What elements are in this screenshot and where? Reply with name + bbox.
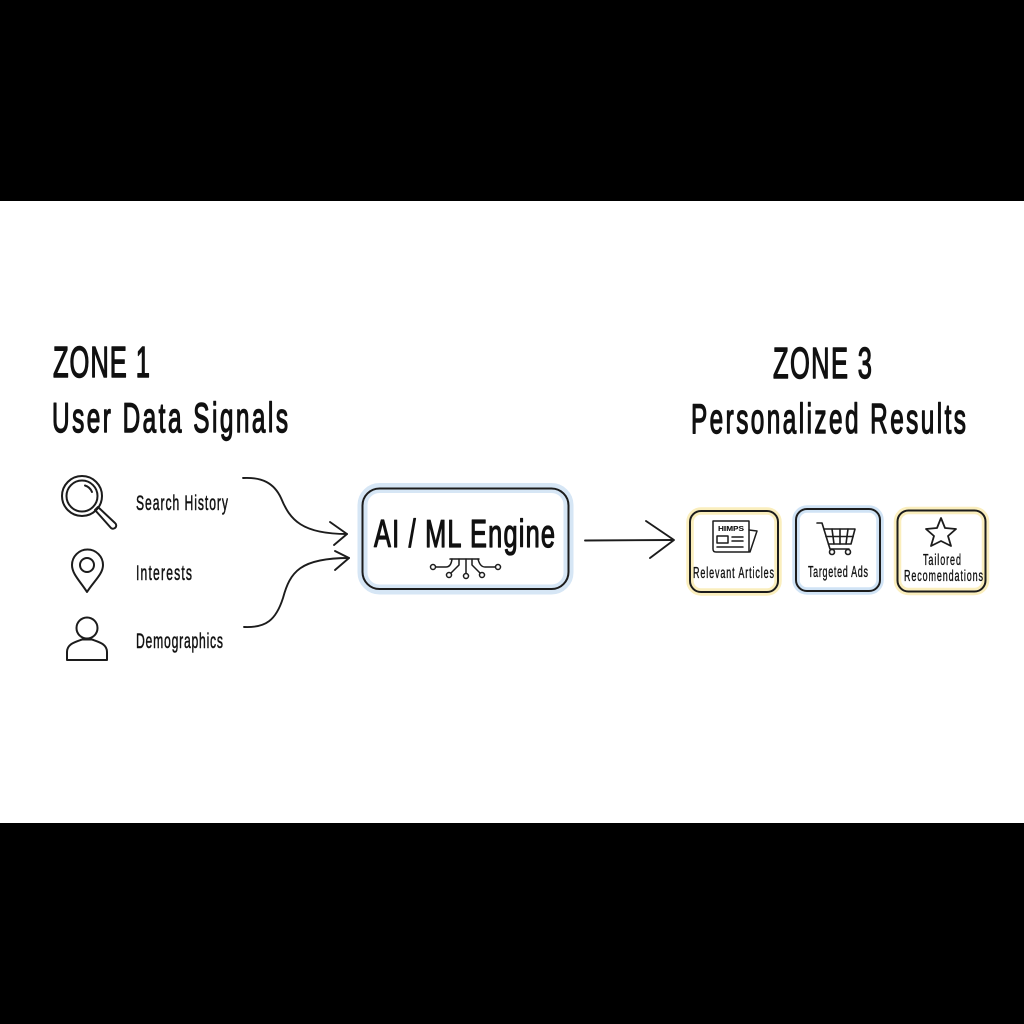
label: demographics: Demographics bbox=[136, 628, 223, 653]
label: targeted ads: Targeted Ads bbox=[808, 564, 868, 581]
icon: star bbox=[926, 518, 956, 546]
panel: targeted ads card bbox=[796, 509, 880, 591]
heading: zone 1: ZONE 1 bbox=[53, 337, 150, 387]
bottom black band bbox=[0, 823, 1024, 1024]
icon: circuit bbox=[430, 559, 500, 578]
label: tailored recomendations bbox=[904, 552, 983, 585]
icon: location pin bbox=[72, 549, 103, 592]
label: interests: Interests bbox=[136, 560, 192, 585]
heading: zone 3: ZONE 3 bbox=[773, 338, 872, 388]
label: relevant articles: Relevant Articles bbox=[693, 565, 774, 582]
panel: tailored recommendations card bbox=[898, 510, 986, 592]
arrow: demographics to engine bbox=[244, 551, 349, 627]
icon: person bbox=[67, 618, 107, 660]
label: search history: Search History bbox=[136, 490, 228, 515]
panel: relevant articles card bbox=[690, 511, 778, 592]
icon: newspaper: HIMPS bbox=[718, 526, 744, 533]
arrow: engine to results bbox=[585, 521, 674, 558]
label: AI / ML Engine: AI / ML Engine bbox=[374, 511, 555, 555]
top black band bbox=[0, 0, 1024, 201]
icon: magnifying glass bbox=[62, 476, 116, 529]
panel: AI / ML engine bbox=[362, 488, 568, 590]
label: tailored recomendations: Tailored bbox=[923, 552, 961, 569]
label: tailored recomendations: Recomendations bbox=[904, 568, 983, 585]
heading: zone 1 bbox=[52, 337, 288, 442]
heading: zone 3: Personalized Results bbox=[691, 396, 966, 443]
heading: zone 3 bbox=[691, 338, 966, 443]
heading: zone 1: User Data Signals bbox=[52, 395, 288, 442]
icon: shopping cart bbox=[817, 523, 855, 554]
arrow: search history to engine bbox=[243, 478, 347, 545]
panel: user data signals list bbox=[62, 476, 228, 660]
